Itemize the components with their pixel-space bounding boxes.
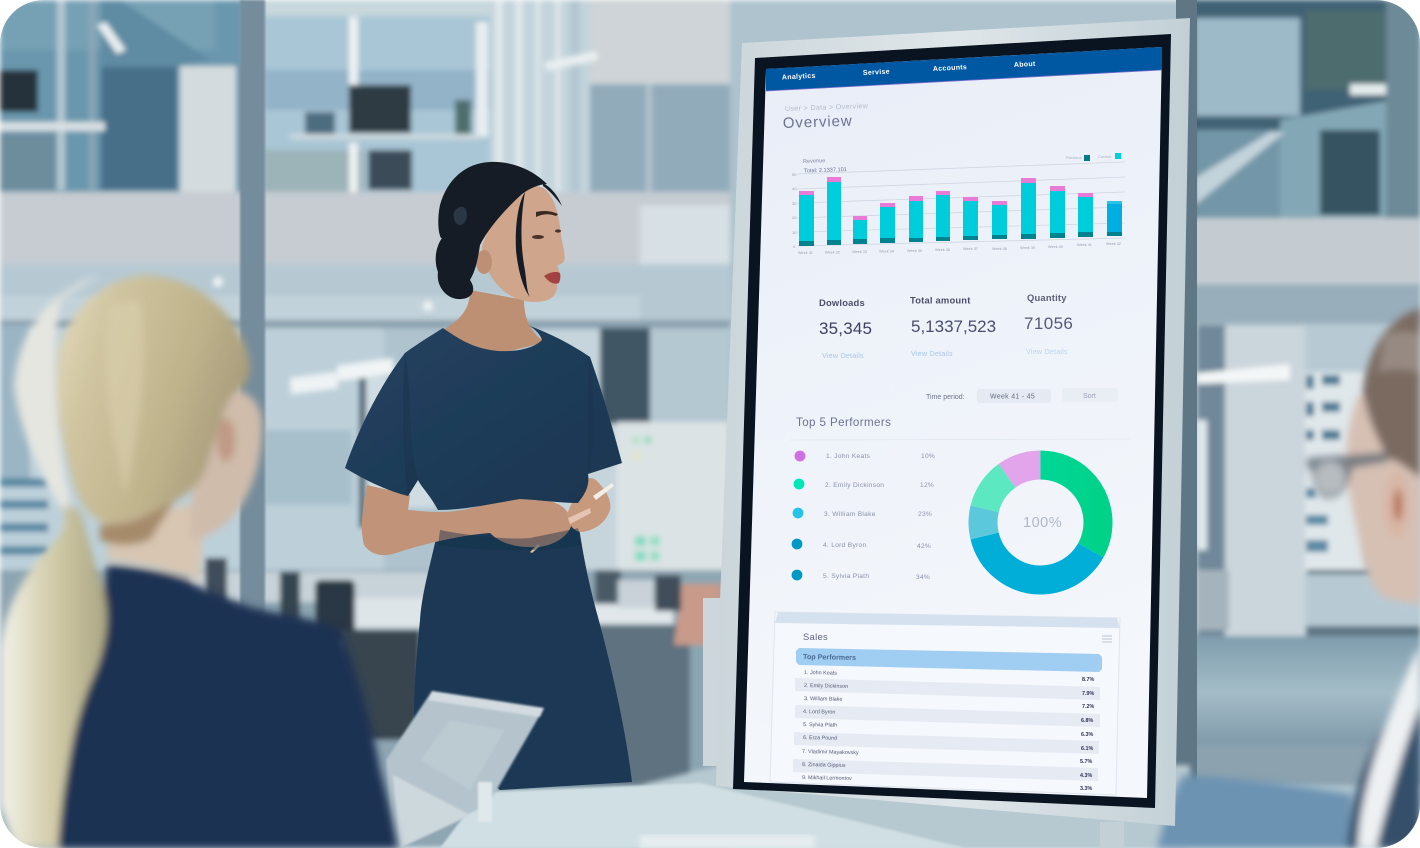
far window left — [0, 329, 239, 570]
table values: 6.3% — [1081, 732, 1093, 738]
monitor stand post — [1176, 0, 1197, 800]
sales card: Top Performers — [803, 652, 856, 662]
colleague hair — [56, 275, 250, 525]
revenue bar chart — [792, 153, 1125, 255]
colleague face — [1347, 395, 1420, 605]
page heading: Overview — [783, 113, 853, 132]
revenue bar chart: 10 — [792, 230, 797, 235]
time period filter — [926, 388, 1118, 403]
colleague shirt — [1358, 645, 1420, 848]
chart legend — [1066, 153, 1121, 161]
stat: downloads: View Details — [822, 351, 864, 360]
performers list: 3. William Blake — [824, 511, 876, 518]
donut chart: 100% — [1023, 515, 1062, 531]
sales card — [770, 612, 1120, 795]
table names: 2. Emily Dickinson — [804, 683, 848, 690]
table values: 4.3% — [1080, 773, 1092, 779]
table names: 8. Zinaida Gippius — [802, 762, 846, 769]
centre glass window — [264, 0, 490, 193]
performers heading: Top 5 Performers — [796, 416, 891, 429]
concrete slab — [0, 192, 730, 264]
table names: 1. John Keats — [804, 670, 837, 677]
colleague jacket — [55, 565, 398, 848]
table names: 6. Erza Pound — [803, 735, 837, 742]
performers list: 4. Lord Byron — [823, 542, 867, 549]
revenue bar chart: 50 — [792, 172, 797, 177]
monitor pedestal — [1100, 822, 1124, 848]
performers list: 34% — [916, 574, 930, 581]
stat: quantity: Quantity — [1027, 292, 1067, 303]
stat: total amount: View Details — [911, 349, 953, 358]
ceiling band — [638, 262, 732, 322]
whiteboard — [617, 422, 728, 573]
open-plan floor — [0, 570, 730, 848]
presenter — [345, 162, 632, 790]
chart legend: Current — [1098, 154, 1112, 159]
revenue bar chart: Revenue — [803, 158, 825, 165]
blonde colleague foreground — [0, 275, 398, 848]
table values: 7.2% — [1082, 704, 1094, 710]
sales card header band — [775, 612, 1120, 628]
stat: quantity: 71056 — [1024, 314, 1073, 333]
monitor bezel — [733, 34, 1171, 808]
floor under monitor — [640, 765, 1190, 848]
navigation bar: Servise — [863, 69, 890, 77]
right of presenter — [538, 328, 618, 573]
table values: 3.3% — [1080, 786, 1092, 792]
stat: total amount — [910, 294, 996, 358]
tablet — [386, 691, 544, 848]
time period filter: Week 41 - 45 — [990, 394, 1035, 400]
chart legend: Previous — [1066, 155, 1082, 160]
presenter waist — [438, 528, 582, 550]
glass pillar — [240, 0, 265, 615]
navigation bar: About — [1014, 61, 1036, 69]
revenue bar chart: 40 — [792, 186, 797, 191]
table names: 3. William Blake — [804, 696, 842, 703]
revenue bar chart: Week 36 — [935, 248, 950, 252]
revenue bar chart: Week 31 — [798, 251, 813, 255]
screen surface — [744, 47, 1162, 798]
colleague hair — [1363, 308, 1420, 478]
dashboard contents — [766, 47, 1162, 795]
table values: 6.8% — [1081, 718, 1093, 724]
table values: 8.7% — [1082, 677, 1094, 683]
performers list: 5. Sylvia Plath — [823, 573, 869, 580]
colleague chair — [1157, 775, 1352, 848]
stat: downloads: 35,345 — [819, 319, 872, 338]
navigation bar — [766, 47, 1162, 91]
revenue bar chart: Week 39 — [1020, 246, 1035, 250]
top performers bar — [796, 648, 1102, 672]
time period filter: Time period: — [926, 394, 965, 401]
conference table — [440, 783, 965, 848]
revenue bar chart: Week 38 — [992, 247, 1007, 251]
male colleague foreground — [1157, 308, 1420, 848]
revenue bar chart: 20 — [792, 215, 797, 220]
stat: total amount: Total amount — [910, 294, 971, 306]
stat: downloads: Dowloads — [819, 297, 865, 308]
card menu icon — [1102, 636, 1112, 642]
performers list — [792, 451, 935, 581]
table names: 5. Sylvia Plath — [803, 722, 837, 729]
table values — [1080, 677, 1094, 792]
colleague suit — [1347, 700, 1420, 848]
colleague ear — [1384, 472, 1410, 538]
performers list: 23% — [918, 511, 932, 518]
revenue bar chart: Week 41 — [1077, 243, 1092, 247]
display monitor — [716, 18, 1190, 826]
colleague ponytail — [0, 505, 107, 848]
navigation bar: Accounts — [933, 64, 967, 73]
presenter neck — [440, 290, 546, 356]
navigation bar: Analytics — [782, 73, 816, 81]
sales card: Sales — [803, 631, 828, 642]
presenter skirt — [414, 520, 632, 790]
stat: downloads — [819, 297, 872, 360]
revenue bar chart: Week 40 — [1048, 245, 1063, 249]
stat: quantity — [1024, 292, 1073, 356]
performers list: 2. Emily Dickinson — [825, 482, 884, 489]
revenue bar chart: Total: 2.1337.101 — [804, 167, 847, 174]
far window centre — [264, 328, 384, 578]
table names — [802, 670, 859, 782]
performers list: 12% — [920, 482, 934, 489]
table values: 6.1% — [1081, 746, 1093, 752]
revenue bar chart: Week 35 — [907, 249, 922, 253]
table values: 7.9% — [1082, 691, 1094, 697]
revenue bar chart: 0 — [793, 244, 796, 249]
colleague glasses — [1307, 452, 1388, 498]
revenue bar chart: Week 42 — [1106, 242, 1121, 246]
revenue bar chart: Week 32 — [825, 250, 840, 254]
table names: 4. Lord Byron — [803, 709, 835, 716]
monitor bracket — [703, 598, 721, 766]
presenter right hand — [568, 478, 610, 532]
performers list: 42% — [917, 543, 931, 550]
stat: quantity: View Details — [1026, 347, 1068, 356]
revenue bar chart: Week 34 — [879, 250, 894, 254]
colleague neck — [107, 500, 205, 580]
breadcrumb: User > Data > Overview — [785, 101, 869, 113]
donut chart — [983, 465, 1098, 580]
right office background — [1190, 0, 1420, 785]
presenter left arm — [362, 485, 572, 555]
presenter ear — [476, 250, 492, 274]
performers list: 1. John Keats — [826, 453, 871, 460]
revenue bar chart: 30 — [792, 201, 797, 206]
right glass stripes — [490, 0, 730, 206]
presenter dress top — [345, 325, 622, 510]
table names: 7. Vladimir Mayakovsky — [802, 749, 859, 756]
colleague hair halo — [10, 278, 92, 511]
table values: 5.7% — [1080, 759, 1092, 765]
performers list: 10% — [921, 453, 935, 460]
colleague ear and cheek — [190, 391, 262, 540]
revenue bar chart: Week 37 — [963, 247, 978, 251]
revenue bar chart: Week 33 — [852, 250, 867, 254]
time period filter: Sort — [1083, 393, 1096, 400]
stat: total amount: 5,1337,523 — [911, 317, 996, 336]
monitor frame — [716, 18, 1190, 826]
presenter hair — [436, 162, 547, 299]
left glass window — [0, 0, 243, 193]
presenter face — [482, 186, 565, 302]
table names: 9. Mikhail Lermontov — [802, 775, 852, 782]
table stripes — [793, 678, 1100, 781]
presenter pen — [593, 483, 614, 500]
